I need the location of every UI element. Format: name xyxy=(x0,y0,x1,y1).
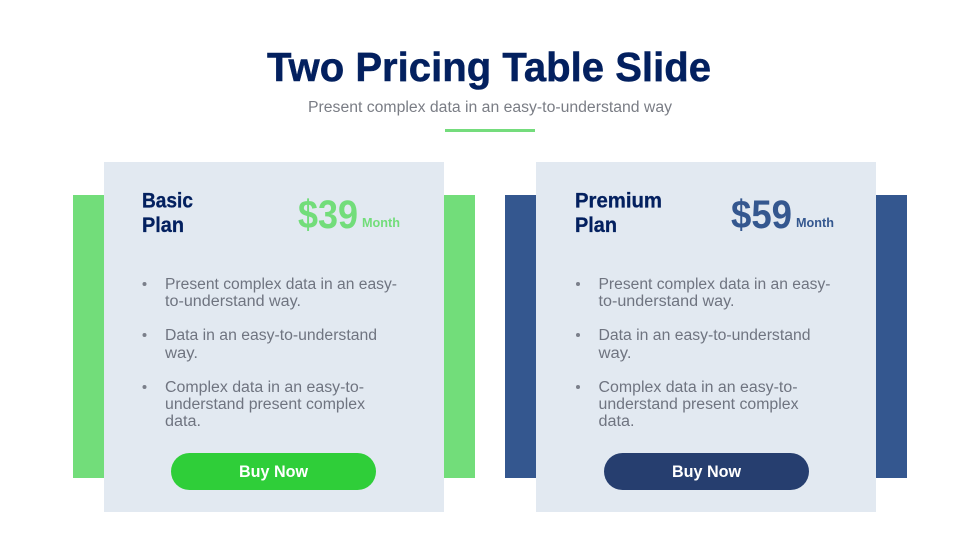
feature list: basic: data. xyxy=(165,413,201,430)
feature list: premium: Present complex data in an easy- xyxy=(598,276,830,293)
price period: basic: Month xyxy=(362,216,400,230)
price period: premium: Month xyxy=(796,216,834,230)
plan name: premium: Plan xyxy=(575,214,617,237)
button: basic: Buy Now xyxy=(239,462,309,481)
feature list: basic: Complex data in an easy-to- xyxy=(165,379,364,396)
backing band: premium xyxy=(505,195,907,478)
card: premium xyxy=(536,162,876,512)
button: premium: Buy Now xyxy=(672,462,742,481)
feature list: premium: data. xyxy=(598,413,634,430)
panel: premium plan xyxy=(505,162,907,512)
plan name: premium: Premium xyxy=(575,190,662,212)
panel: basic plan xyxy=(73,162,475,512)
feature list: premium xyxy=(576,276,830,430)
feature list: premium: understand present complex xyxy=(598,396,799,413)
accent line xyxy=(445,129,535,132)
plan name: basic: Plan xyxy=(142,214,184,237)
button: premium xyxy=(604,453,809,490)
button: basic xyxy=(171,453,376,490)
feature list: basic xyxy=(142,276,397,430)
feature list: basic: to-understand way. xyxy=(165,293,301,310)
feature list: basic: understand present complex xyxy=(165,396,365,413)
feature list: basic: Data in an easy-to-understand xyxy=(165,327,377,344)
subtitle: Present complex data in an easy-to-understand way xyxy=(308,99,672,116)
card: basic xyxy=(104,162,444,512)
backing band: basic xyxy=(73,195,475,478)
feature list: premium: Complex data in an easy-to- xyxy=(598,379,798,396)
plan name: basic: Basic xyxy=(142,190,193,212)
feature list: basic: way. xyxy=(164,345,198,362)
feature list: premium: to-understand way. xyxy=(598,293,734,310)
price: premium: $59 xyxy=(731,193,792,237)
feature list: basic: Present complex data in an easy- xyxy=(165,276,397,293)
price: basic: $39 xyxy=(298,193,358,237)
title: Two Pricing Table Slide xyxy=(267,44,711,90)
feature list: premium: way. xyxy=(597,345,632,362)
feature list: premium: Data in an easy-to-understand xyxy=(598,327,810,344)
